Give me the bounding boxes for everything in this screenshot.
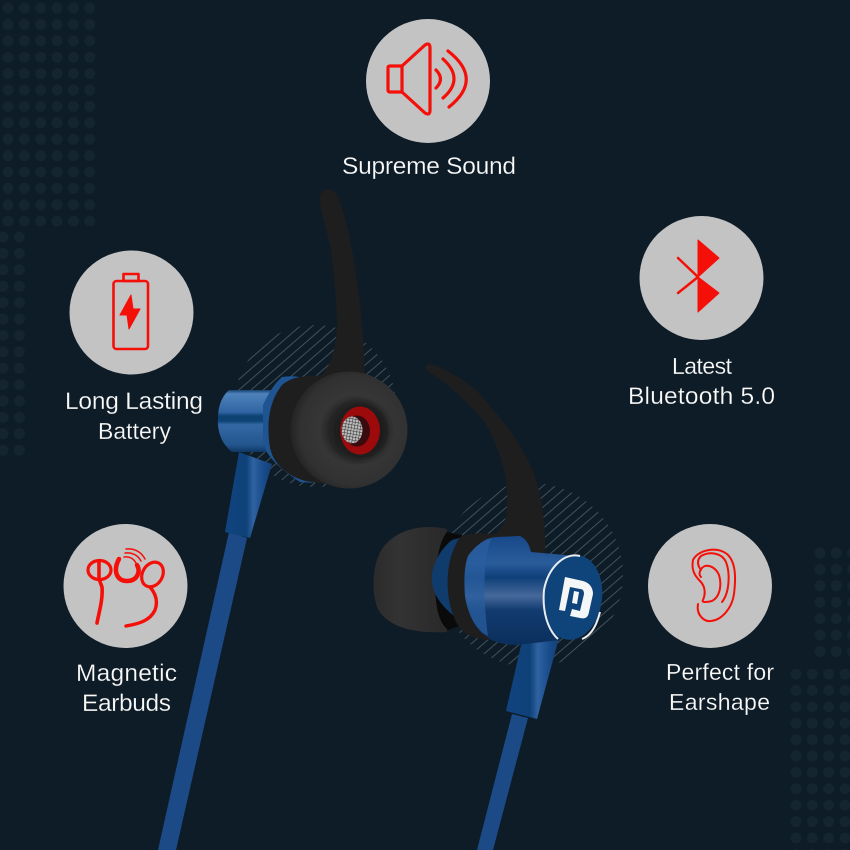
icon circle: magnetic [64, 524, 188, 648]
left earbud [158, 189, 408, 850]
hatch circle: right earbud [439, 483, 623, 667]
stem: left [225, 452, 272, 538]
end cap silver rim [544, 555, 600, 639]
icon: bluetooth [678, 240, 719, 312]
cable: left [158, 532, 247, 850]
icon: battery [114, 274, 148, 349]
feature: bluetooth [628, 216, 775, 410]
mesh [342, 416, 362, 444]
label: supreme sound: Supreme Sound [342, 153, 516, 180]
body front flare highlight [464, 538, 492, 636]
label: long lasting: Long Lasting [65, 388, 203, 415]
stem: right [506, 628, 559, 719]
cable: right [477, 714, 528, 850]
ear tip [290, 372, 408, 488]
right earbud [373, 364, 608, 850]
dot pattern: top left [0, 0, 97, 226]
label: perfect for: Perfect for [666, 659, 774, 685]
nozzle shadow [333, 403, 389, 459]
red nozzle ring [340, 406, 380, 454]
hatch circle: left earbud [234, 325, 396, 487]
icon: ear [692, 550, 735, 621]
feature: battery [65, 250, 203, 444]
dot pattern: right lower [788, 666, 850, 850]
blue cylinder [218, 390, 275, 452]
icon circle: sound [366, 19, 490, 143]
label: earbuds: Earbuds [82, 690, 171, 717]
icon: earbuds and magnet [88, 549, 168, 626]
label: magnetic: Magnetic [76, 660, 177, 687]
body [464, 536, 576, 645]
label: battery: Battery [98, 418, 172, 444]
label: bluetooth 5.0: Bluetooth 5.0 [628, 383, 775, 410]
brand logo [559, 577, 593, 618]
feature: earshape [648, 524, 774, 715]
collar: right [432, 535, 490, 636]
nozzle inner [344, 416, 370, 446]
ear hook: right [426, 364, 545, 560]
icon circle: bluetooth [640, 216, 764, 340]
end cap disc [538, 551, 608, 644]
feature: supreme sound [342, 19, 516, 180]
dot pattern: right upper [812, 545, 850, 660]
icon: speaker [388, 44, 466, 114]
feature: magnetic earbuds [64, 524, 188, 717]
tip opening [435, 532, 462, 630]
label: earshape: Earshape [669, 689, 770, 715]
ear tip: right [373, 527, 447, 632]
icon circle: battery [70, 250, 194, 374]
silicone sleeve: right [448, 533, 500, 640]
ear hook: left [320, 189, 365, 378]
collar [263, 376, 315, 483]
dot pattern: left middle [0, 229, 28, 459]
label: latest: Latest [672, 353, 733, 379]
silicone sleeve [268, 373, 350, 486]
icon circle: ear [648, 524, 772, 648]
